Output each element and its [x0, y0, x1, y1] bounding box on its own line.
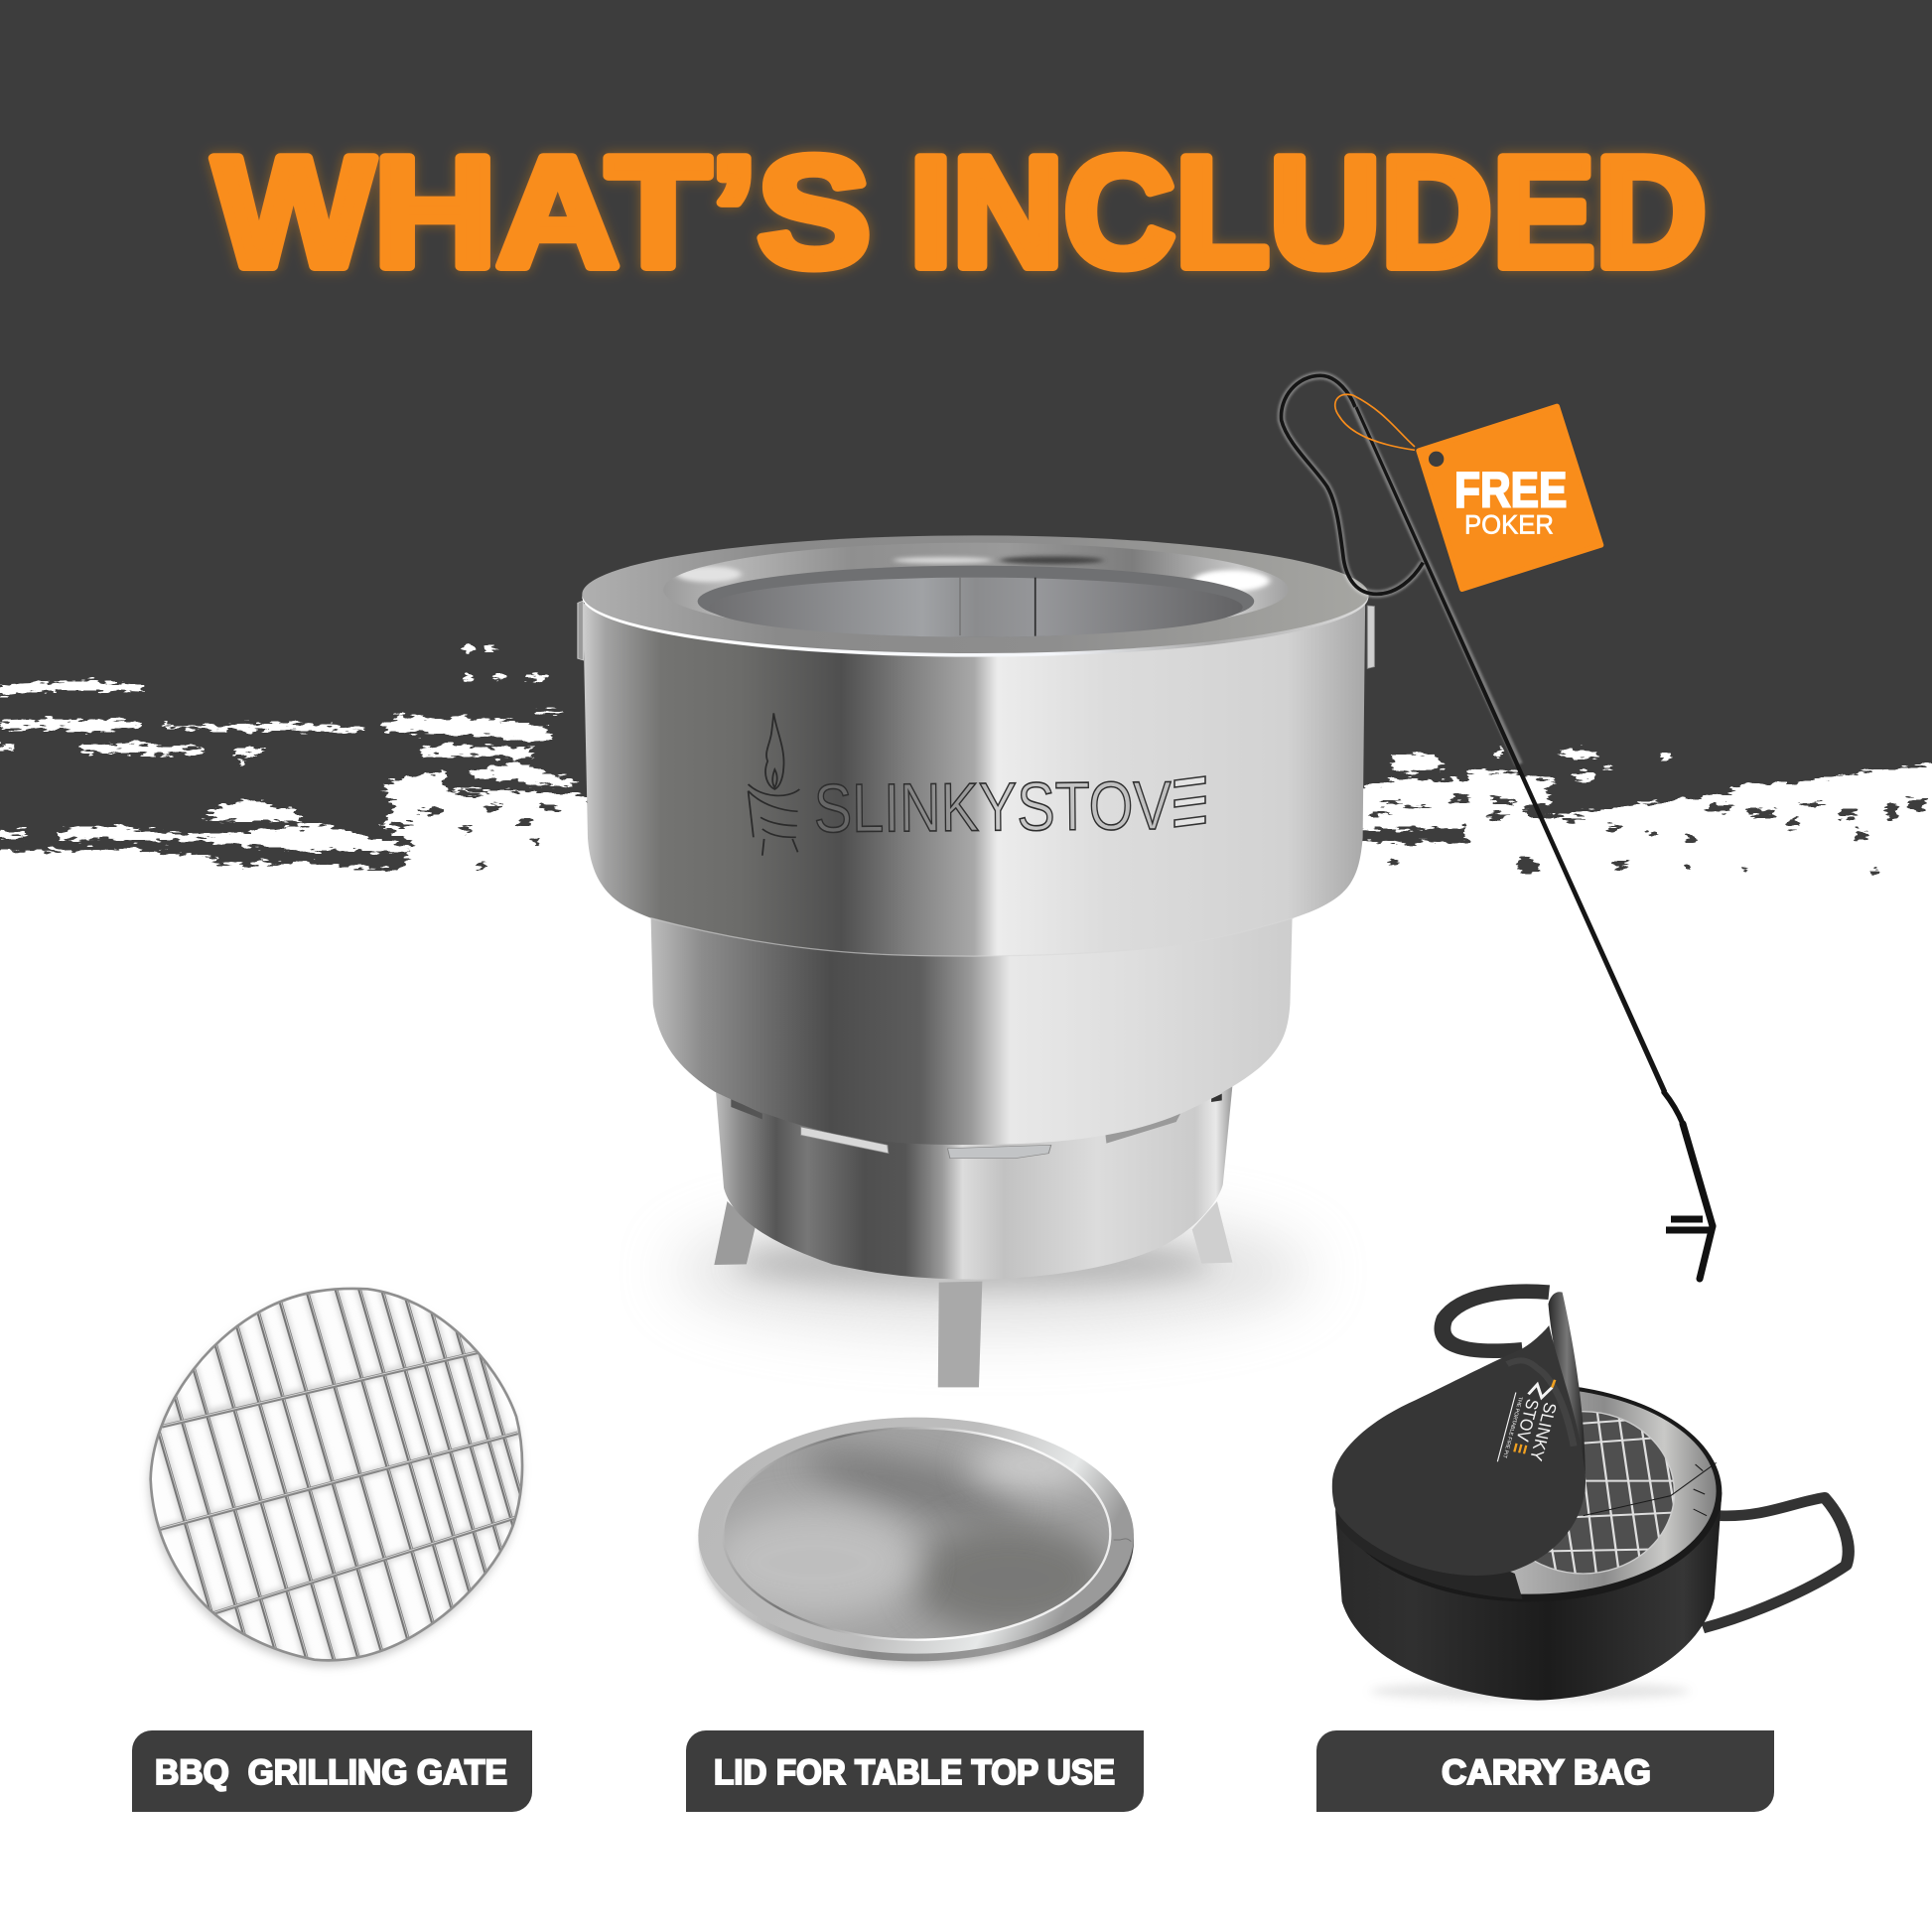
- label: bbq grilling grate: BBQ GRILLING GATE: [155, 1753, 507, 1792]
- bag top handle: [1443, 1292, 1549, 1351]
- poker lower bend: [1664, 1092, 1713, 1279]
- label: carry bag: [1316, 1730, 1774, 1812]
- bag flap: [1332, 1325, 1586, 1576]
- tag text FREE: FREE: [1454, 463, 1567, 518]
- stove lower body with vents: [716, 1085, 1232, 1280]
- label: carry bag: CARRY BAG: [1442, 1753, 1651, 1792]
- label: bbq grilling grate: [132, 1730, 532, 1812]
- stove embossed logo: [749, 713, 1205, 856]
- label: lid for table top use: LID FOR TABLE TOP USE: [714, 1753, 1115, 1792]
- free poker tag: [1335, 394, 1601, 589]
- brush stroke background: [0, 0, 1932, 877]
- logo flame and coil icon: [749, 713, 799, 856]
- tag text POKER: POKER: [1464, 510, 1554, 540]
- bag right handle: [1703, 1497, 1849, 1628]
- bag flap logo: [1497, 1373, 1566, 1470]
- stove upper body: [583, 604, 1365, 956]
- poker shaft: [1355, 406, 1667, 1093]
- stove: [578, 535, 1374, 1387]
- bag body edge covering the left of the opening: [1336, 1506, 1522, 1599]
- bag folded flap: [1548, 1292, 1586, 1492]
- carry bag: [1332, 1292, 1849, 1701]
- bag open interior with grate: [1334, 1383, 1722, 1601]
- logo wordmark: SLINKYSTOV: [813, 767, 1172, 847]
- poker loop handle: [1281, 375, 1423, 594]
- stove legs: [714, 1201, 1232, 1387]
- label: lid for table top use: [686, 1730, 1144, 1812]
- stove rim and opening: [578, 535, 1374, 668]
- bag body: [1335, 1492, 1722, 1701]
- stove middle body: [650, 905, 1293, 1145]
- bag flap logo: SLINKY: [1526, 1401, 1560, 1462]
- poker with free tag: [1281, 375, 1713, 1279]
- tag string: [1335, 394, 1415, 450]
- bag flap logo: STOV: [1512, 1397, 1542, 1443]
- bag flap logo: THE PORTABLE FIRE PIT: [1501, 1396, 1523, 1458]
- table top lid: [698, 1418, 1134, 1665]
- stove ground shadow: [675, 1211, 1311, 1330]
- logo E bars: [1174, 776, 1205, 827]
- title: WHAT’S: [213, 125, 871, 300]
- title: [213, 125, 1707, 300]
- poker glow on dark background: [1281, 375, 1519, 764]
- bag ground shadow: [1370, 1681, 1690, 1701]
- grilling grate: [145, 1287, 526, 1670]
- title: INCLUDED: [909, 125, 1707, 300]
